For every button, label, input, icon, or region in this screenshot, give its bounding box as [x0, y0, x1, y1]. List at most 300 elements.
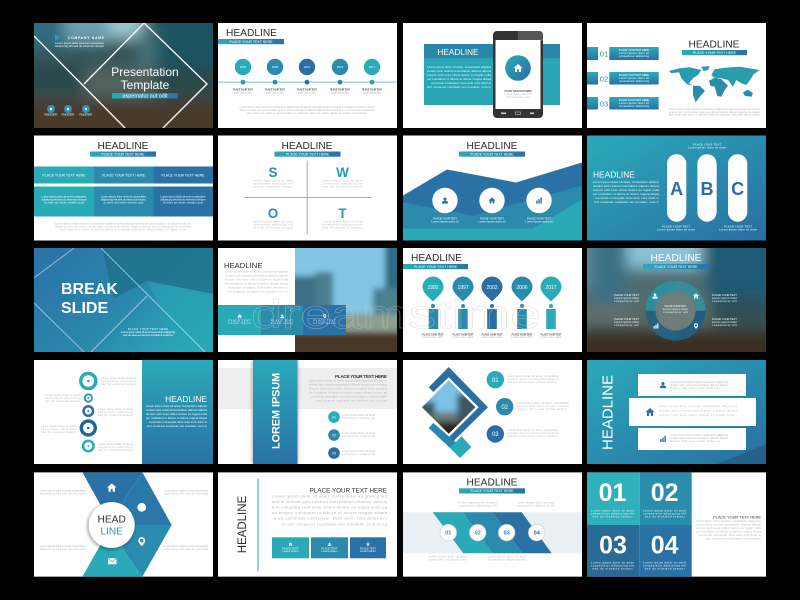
SWOT text: consectetur adipiscing elit — [253, 182, 293, 186]
panel text: tempor velit esse cillum dolore eu fugiat nulla — [146, 412, 207, 416]
paragraph: Lorem ipsum dolor sit amet, consectetur adipisci — [225, 270, 288, 274]
card middle: tempor velit esse cillum dolore eu fugiat nulla — [659, 413, 734, 417]
panel text: Lorem ipsum dolor sit amet, consectetur adipisci — [146, 404, 207, 408]
pin labels: PLACE YOUR TEXT — [540, 334, 562, 336]
pill captions: Lorem ipsum dolor sit amet — [657, 228, 695, 232]
band: Lorem ipsum — [271, 321, 294, 325]
paragraph: veniam quis nostrud exercitation ullamco laboris — [225, 274, 289, 278]
paragraph: Lorem ipsum dolor sit amet consectetur adipiscing elit sed do eiusmod tempor incididunt ut labore et dolore magna — [240, 105, 375, 109]
side text: adipiscing elit sed do eiusmod — [40, 547, 85, 551]
paragraph: Lorem ipsum dolor sit amet, consectetur adipiscing elit sed do — [309, 378, 388, 382]
pill captions — [657, 142, 757, 232]
SWOT text: Lorem ipsum dolor sit amet — [322, 178, 363, 182]
tile 03: sed do eiusmod tempor — [592, 566, 633, 570]
cover title: aspernatur aut odit — [123, 94, 168, 100]
diamond outline lines — [34, 23, 207, 128]
band: PLACE TEXT — [314, 318, 336, 322]
slide 1: cover — [34, 23, 213, 128]
SWOT letters: O — [268, 206, 278, 221]
slide 6: SWOT — [218, 136, 397, 240]
pill captions: PLACE YOUR TEXT — [724, 224, 752, 228]
paragraph: commodo consequat. Duis aute irure dolor in — [228, 286, 288, 290]
timeline circles: 1996 — [272, 65, 279, 69]
blurred photo — [295, 248, 397, 352]
paragraph — [272, 493, 388, 526]
paragraph — [309, 378, 388, 402]
SWOT text: Lorem ipsum dolor sit amet — [253, 178, 293, 182]
side notes: consectetur elit — [614, 323, 639, 327]
gray band — [218, 368, 397, 409]
hub: HEAD — [98, 514, 126, 525]
caption: PLACE YOUR TEXT HERE — [128, 327, 168, 331]
bullet text: Lorem ipsum dolor sit amet — [342, 413, 375, 417]
slide 9: break slide — [34, 248, 213, 352]
card text: commodo consequat. Duis aute irure dolor in — [431, 81, 491, 85]
chevron notes: consectetur adipiscing elit — [517, 503, 555, 507]
column bodies — [34, 186, 213, 216]
side notes: Lorem ipsum dolor — [614, 320, 639, 324]
side notes — [614, 293, 737, 327]
three boxes: PLACE TEXT — [322, 546, 338, 550]
numbered circles: 03 — [504, 531, 510, 537]
pale band — [403, 512, 582, 553]
pin labels — [422, 334, 562, 339]
numbered circles: 02 — [501, 405, 509, 411]
column bodies: ut enim ad minim veniam quis — [44, 200, 85, 204]
paragraph: sint occaecat cupidatat non proident, sunt in — [227, 290, 288, 294]
timeline circles: 1992 — [240, 65, 247, 69]
teal rule — [258, 478, 259, 571]
diamond frame — [429, 367, 488, 458]
ring notes: Lorem ipsum dolor sit amet — [45, 393, 80, 397]
side text: Lorem ipsum dolor sit amet consectetur — [164, 544, 208, 548]
numbered list: consectetur adipiscing — [619, 104, 649, 108]
vertical panel: LOREM IPSUM — [270, 373, 282, 449]
SWOT text: consectetur adipiscing elit — [322, 182, 363, 186]
rotated headline: HEADLINE — [600, 375, 616, 450]
subtitle bar — [459, 488, 525, 494]
band: PLACE TEXT — [228, 318, 251, 322]
ring notes: Lorem ipsum dolor sit amet — [98, 442, 133, 446]
timeline circles: 2011 — [304, 65, 310, 69]
paragraph: it in voluptate velit esse cillum dolore eu fugiat nulla pa — [272, 504, 388, 509]
hub: LINE — [100, 526, 123, 537]
bullet text: Lorem ipsum dolor sit amet — [342, 431, 375, 435]
timeline labels: Lorem ipsum dolor — [234, 90, 252, 94]
phone: Lorem ipsum dolor sit — [504, 92, 532, 96]
side notes: PLACE YOUR TEXT — [614, 293, 639, 297]
arrow segments — [82, 472, 172, 577]
card middle — [629, 398, 756, 426]
diamond photo — [422, 380, 476, 434]
timeline labels: Lorem ipsum dolor — [331, 90, 349, 94]
pill captions: PLACE YOUR TEXT — [662, 224, 690, 228]
SWOT text: sed do eiusmod tempor — [322, 226, 363, 230]
column bodies: adipiscing elit sed do eiusmod tempor — [101, 198, 146, 202]
teal card — [424, 44, 560, 105]
pin 2002: 2002 — [486, 285, 498, 291]
grid paragraph: commodo consequat. Duis aute irure dolor in — [699, 533, 762, 537]
grid paragraph: tempor velit esse cillum dolore eu fugiat nulla — [696, 526, 762, 530]
paragraph: u ea commodo consequat. Duis aute irure dolor in r — [274, 516, 388, 521]
phone — [493, 31, 543, 118]
paragraph: tempor velit esse cillum dolore eu fugiat nulla — [225, 278, 288, 282]
headline: HEADLINE — [98, 141, 149, 152]
tile 01: sed do eiusmod tempor — [592, 514, 633, 518]
SWOT letters: T — [338, 206, 347, 221]
map caption — [669, 107, 760, 116]
circle notes: Lorem ipsum dolor sit amet, consectetur — [507, 428, 559, 432]
pin labels: Lorem ipsum dolor — [540, 335, 562, 339]
break title — [61, 281, 118, 317]
pin 1997 — [452, 276, 474, 329]
grid paragraph: Lorem ipsum dolor sit amet, consectetur adipiscing — [696, 519, 762, 523]
captions: Lorem ipsum dolor sit — [526, 220, 553, 224]
timeline circles: 2014 — [337, 65, 344, 69]
map caption: ut enim ad minim veniam quis nostrud exercitation ullamco laboris nisi aliquip — [669, 110, 760, 114]
numbered list: Lorem ipsum dolor sit — [619, 51, 649, 55]
SWOT text: Lorem ipsum dolor sit amet — [253, 220, 293, 224]
tile 02: consectetur adipiscing elit — [643, 511, 686, 515]
timeline axis — [218, 81, 397, 83]
numbered circles: 02 — [475, 531, 481, 537]
circle notes: veniam quis nostrud exercitation — [507, 431, 560, 435]
icon circles — [432, 188, 552, 213]
numbered list: PLACE YOUR TEXT HERE — [619, 73, 649, 77]
tile 01 — [587, 472, 640, 525]
bullet text: Lorem ipsum dolor sit amet — [342, 449, 375, 453]
band: PLACE TEXT — [271, 318, 293, 322]
caption: sed do eiusmod tempor incididunt ut labore — [123, 333, 173, 337]
pin 2002 — [482, 276, 502, 329]
tile 04 — [640, 525, 692, 577]
SWOT text: sed do eiusmod tempor — [253, 184, 293, 188]
column headers: PLACE YOUR TEXT HERE — [102, 174, 146, 178]
column bodies: Lorem ipsum dolor sit amet consectetur — [42, 194, 87, 198]
paragraph: duis aute irure dolor in reprehenderit in voluptate velit esse cillum dolore eu fugiat nulla pariatur — [247, 111, 367, 115]
pill C — [728, 154, 747, 222]
slide 4: world map — [587, 23, 766, 128]
captions: PLACE YOUR TEXT — [433, 216, 457, 220]
ring notes: Lorem ipsum dolor sit amet — [98, 407, 133, 411]
chevron notes: Lorem ipsum dolor sit amet — [488, 554, 526, 558]
three boxes: PLACE TEXT — [282, 546, 299, 550]
world map — [669, 66, 760, 102]
cover title: Template — [121, 78, 170, 92]
numbered list: PLACE YOUR TEXT HERE — [619, 98, 649, 102]
paragraph — [225, 270, 289, 294]
pin labels: PLACE YOUR TEXT — [422, 334, 444, 336]
right panel — [142, 360, 213, 464]
numbered list: 01 — [600, 50, 608, 58]
slanted stripes — [433, 512, 552, 553]
tile 02 — [640, 472, 692, 525]
pill C: C — [731, 179, 744, 199]
tile 03: consectetur adipiscing elit — [591, 563, 634, 567]
panel text — [146, 404, 208, 428]
card text: veniam quis nostrud exercitation ullamco laboris — [427, 69, 492, 73]
panel text: veniam quis nostrud exercitation ullamco laboris — [146, 408, 208, 412]
numbered list: 02 — [600, 74, 608, 84]
paragraph: Lorem ipsum dolor sit amet, consectetur ad grating elit — [272, 493, 388, 498]
pin labels: PLACE YOUR TEXT — [482, 334, 503, 336]
caption: Lorem ipsum dolor sit amet consectetur adipiscing — [121, 330, 175, 334]
SWOT cross — [244, 160, 372, 234]
card top: Lorem ipsum dolor sit amet, consectetur adipiscing — [670, 380, 728, 384]
timeline labels — [233, 88, 382, 94]
three boxes: Lorem ipsum — [322, 549, 338, 553]
tile 03 — [587, 525, 640, 577]
slide 10: photo with band — [218, 248, 397, 352]
subtitle bar: PLACE YOUR TEXT HERE — [470, 152, 514, 156]
cover title — [111, 65, 179, 100]
slide 14: lorem ipsum column — [218, 360, 397, 464]
grid paragraph — [696, 519, 762, 540]
card text: tempor velit esse cillum dolore eu fugiat nulla — [427, 73, 491, 77]
ring notes — [41, 376, 136, 452]
column bodies: adipiscing elit sed do eiusmod tempor — [42, 198, 87, 202]
slide 8: ABC pills — [587, 136, 766, 240]
paragraph: aliqua ut enim ad minim veniam quis nostrud exercitation ullamco laboris nisi ut aliquip ex ea commodo — [55, 224, 191, 228]
numbered circles: 04 — [534, 531, 541, 537]
numbered list: 03 — [600, 100, 608, 108]
card top: veniam quis nostrud exercitation ullamco laboris — [670, 383, 729, 387]
subtitle bar — [218, 39, 284, 44]
break title: BREAK — [61, 281, 118, 298]
tile 04: consectetur adipiscing elit — [643, 563, 686, 567]
numbered bullets: 01 — [332, 415, 336, 419]
card top: tempor velit esse cillum dolore eu — [670, 386, 720, 390]
bullet text: consectetur adipiscing — [342, 434, 376, 438]
timeline labels: PLACE YOUR TEXT — [233, 88, 253, 92]
pin 1997: 1997 — [457, 285, 469, 291]
pin 1992: 1992 — [427, 285, 439, 291]
tile 02: sed do eiusmod tempor — [645, 514, 685, 518]
cover title: Presentation — [111, 65, 179, 79]
body text: veniam quis nostrud exercitation ullamco laboris — [593, 184, 660, 188]
slide 15: diamond photo — [403, 360, 582, 464]
subtitle bar: PLACE YOUR TEXT HERE — [654, 265, 698, 269]
pin 2017 — [540, 276, 562, 329]
headline: HEADLINE — [689, 40, 740, 50]
blurred city photo — [4, 0, 246, 163]
paragraph: per incididunt ut labore et dolore magna aliqua — [225, 282, 288, 286]
grid heading: PLACE YOUR TEXT HERE — [713, 514, 761, 519]
slide 20: number grid — [587, 472, 766, 577]
side text: adipiscing elit sed do eiusmod — [164, 491, 208, 495]
headline: HEADLINE — [282, 141, 333, 152]
ring notes: sed do eiusmod tempor — [41, 430, 76, 434]
SWOT letters: W — [336, 165, 349, 180]
pin 2006: 2006 — [516, 285, 528, 291]
card bottom: tempor velit esse cillum dolore eu — [670, 439, 720, 443]
side notes: PLACE YOUR TEXT — [712, 293, 737, 297]
numbered circles: 03 — [492, 432, 499, 438]
headline: HEADLINE — [224, 261, 262, 270]
teal card: HEADLINE — [438, 48, 479, 57]
SWOT letters — [268, 165, 349, 221]
circle notes: tempor velit esse cillum dolore — [507, 434, 558, 438]
card text — [427, 65, 492, 89]
slide 16: stacked cards — [587, 360, 766, 464]
captions: Lorem ipsum dolor sit — [478, 220, 506, 224]
timeline labels: Lorem ipsum dolor — [266, 90, 284, 94]
paragraph: veniam quis nostrud exercitation ullamco laboris nisi ut aliquip — [309, 382, 388, 386]
tile 03: Lorem ipsum dolor sit amet — [591, 560, 634, 564]
subtitle bar: PLACE YOUR TEXT HERE — [102, 152, 145, 156]
company name — [55, 34, 105, 48]
circle notes: Lorem ipsum dolor sit amet, consectetur — [516, 401, 569, 405]
pill A — [667, 154, 686, 222]
numbered bullets: 03 — [332, 451, 336, 455]
timeline labels: PLACE YOUR TEXT — [265, 88, 285, 92]
paragraph: per incididunt ut labore et dolore magna aliqua ut enim ad — [309, 390, 388, 394]
numbered circles: 01 — [492, 378, 499, 384]
heading: PLACE YOUR TEXT HERE — [310, 487, 387, 494]
column bodies: Lorem ipsum dolor sit amet consectetur — [160, 194, 206, 198]
subtitle bar — [90, 152, 156, 157]
tile 04: sed do eiusmod tempor — [645, 566, 685, 570]
heading: PLACE YOUR TEXT HERE — [335, 374, 387, 379]
paragraph — [240, 105, 375, 115]
ring chart: PLACE YOUR TEXT — [664, 304, 687, 308]
numbered list: Lorem ipsum dolor sit — [619, 101, 649, 105]
ring notes: sed do eiusmod tempor — [45, 399, 80, 403]
vertical panel — [251, 360, 299, 464]
three boxes: Lorem ipsum — [282, 549, 299, 553]
slide 17: arrow with hub — [34, 472, 213, 577]
company name: COMPANY NAME — [68, 36, 105, 40]
paragraph: ut sint occaecat cupidatat non proident, sunt in cu — [282, 521, 387, 526]
side text: Lorem ipsum dolor sit amet consectetur — [164, 488, 208, 492]
panel text: sint occaecat cupidatat non proident, sunt in — [147, 424, 207, 428]
timeline labels: PLACE YOUR TEXT — [362, 88, 382, 92]
bullet text — [342, 413, 376, 456]
pin 2017: 2017 — [545, 285, 557, 291]
headline: HEADLINE — [165, 394, 207, 404]
break title: SLIDE — [61, 300, 108, 317]
paragraph — [55, 222, 191, 232]
pin labels: PLACE YOUR TEXT — [452, 334, 474, 336]
timeline labels: Lorem ipsum dolor — [298, 90, 316, 94]
subtitle bar — [682, 50, 747, 55]
slide 11: pin chart — [403, 248, 582, 352]
paragraph: ad tempor incididunt ut labore et dolore magna aliqua — [272, 510, 388, 515]
SWOT text: consectetur adipiscing elit — [253, 222, 293, 226]
ring chain — [79, 372, 98, 452]
bullet text: consectetur adipiscing — [342, 452, 376, 456]
numbered bullets — [328, 411, 340, 459]
ring chart — [646, 281, 706, 341]
grid paragraph: sint occaecat cupidatat non proident — [706, 536, 761, 540]
pill B — [697, 154, 717, 222]
card text: Lorem ipsum dolor sit amet, consectetur adipisci — [427, 65, 491, 69]
three boxes: Lorem ipsum — [360, 549, 377, 553]
subtitle bar: PLACE YOUR TEXT HERE — [286, 152, 330, 156]
thin lines — [34, 248, 205, 352]
ring notes: consectetur adipiscing — [98, 445, 134, 449]
three boxes: PLACE TEXT — [360, 546, 376, 550]
grid paragraph: veniam quis nostrud exercitation ullamco laboris — [696, 522, 762, 526]
side notes: PLACE YOUR TEXT — [614, 317, 639, 321]
chevron notes — [428, 500, 555, 561]
pill captions: Lorem ipsum dolor sit amet — [719, 228, 757, 232]
card middle: veniam quis nostrud exercitation ullamco laboris — [659, 408, 738, 412]
column headers: PLACE YOUR TEXT HERE — [42, 174, 86, 178]
band: Lorem ipsum — [314, 321, 336, 325]
rotated headline: HEADLINE — [237, 495, 249, 553]
subtitle bar: PLACE YOUR TEXT HERE — [693, 51, 737, 55]
arrow icons — [107, 483, 146, 564]
watermark: dreamstime — [251, 293, 541, 337]
pin labels: Lorem ipsum dolor — [512, 335, 533, 339]
hub — [86, 502, 135, 550]
pill B: B — [700, 179, 714, 199]
paragraph: commodo consequat. Duis aute irure dolor in reprehenderit — [311, 394, 387, 398]
ring notes: Lorem ipsum dolor sit amet — [101, 376, 136, 380]
pin 2006 — [512, 276, 532, 329]
ring chart: consectetur elit — [663, 310, 688, 314]
pin 1992 — [422, 276, 444, 329]
column bodies: Lorem ipsum dolor sit amet consectetur — [101, 194, 146, 198]
timeline labels: PLACE YOUR TEXT — [297, 88, 317, 92]
ring notes: sed do eiusmod tempor — [98, 413, 133, 417]
pill captions: Lorem ipsum dolor sit amet — [688, 146, 726, 150]
tile 01: 01 — [599, 479, 626, 507]
polygon facets — [102, 248, 213, 352]
circle notes — [507, 374, 569, 438]
grid paragraph: per incididunt ut labore et dolore magna aliqua — [696, 529, 762, 533]
tile 04: Lorem ipsum dolor sit amet — [643, 560, 686, 564]
column bodies: ut enim ad minim veniam quis — [163, 200, 204, 204]
timeline labels: PLACE YOUR TEXT — [330, 88, 350, 92]
chevron notes: Lorem ipsum dolor sit amet — [517, 500, 555, 504]
ring notes: consectetur adipiscing — [98, 410, 134, 414]
card bottom: veniam quis nostrud exercitation ullamco laboris — [670, 436, 729, 440]
tile 02: Lorem ipsum dolor sit amet — [643, 508, 686, 512]
body text: commodo consequat. Duis aute irure dolor in — [595, 196, 659, 200]
subtitle bar: PLACE YOUR TEXT HERE — [230, 40, 273, 44]
tile 01: Lorem ipsum dolor sit amet — [591, 508, 634, 512]
phone: PLACE YOUR TEXT HERE — [504, 90, 532, 93]
body text — [593, 180, 660, 204]
column headers — [34, 166, 213, 184]
tile 02: 02 — [651, 479, 679, 507]
body text: Lorem ipsum dolor sit amet, consectetur adipisci — [593, 180, 659, 184]
card bottom: Lorem ipsum dolor sit amet, consectetur adipiscing — [670, 433, 728, 437]
pill captions: PLACE YOUR TEXT — [693, 142, 721, 146]
numbered list — [587, 47, 659, 110]
numbered circles — [440, 524, 545, 541]
bullet text: consectetur adipiscing — [342, 416, 376, 420]
circle notes: Lorem ipsum dolor sit amet, consectetur — [507, 374, 559, 378]
headline: HEADLINE — [593, 170, 635, 180]
subtitle bar — [459, 152, 525, 157]
slide 5: three columns — [34, 136, 213, 240]
chevron notes: Lorem ipsum dolor sit amet — [458, 500, 497, 504]
circle notes: veniam quis nostrud exercitation — [507, 377, 560, 381]
paragraph: Lorem ipsum dolor sit amet consectetur adipiscing elit sed do eiusmod tempor incididunt ut labore et dolore — [55, 222, 191, 226]
map caption: duis aute irure dolor in reprehenderit in voluptate velit esse cillum dolore — [669, 112, 760, 116]
SWOT text: sed do eiusmod tempor — [253, 226, 293, 230]
timeline labels: Lorem ipsum dolor — [363, 90, 381, 94]
captions: PLACE YOUR TEXT — [527, 216, 551, 220]
subtitle bar — [403, 264, 468, 269]
card top — [638, 374, 746, 396]
headline: HEADLINE — [467, 477, 518, 488]
cover icons — [44, 105, 93, 116]
ring chart: Lorem ipsum dolor — [663, 307, 688, 311]
